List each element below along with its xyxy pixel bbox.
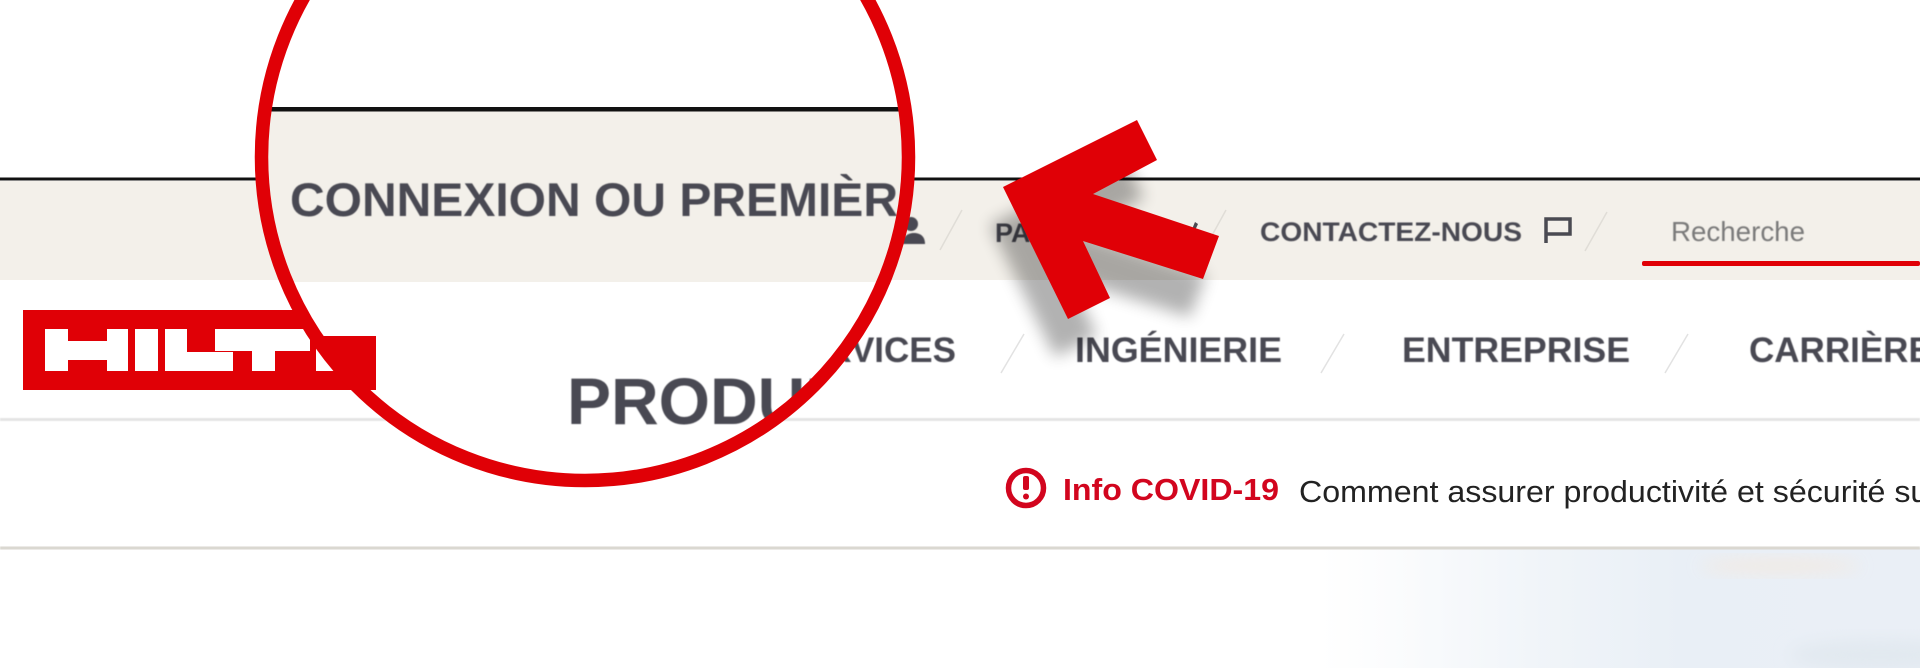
text: search placeholder: Recherche	[1671, 216, 1805, 247]
text: nav services: SERVICES	[780, 331, 956, 370]
logo: Hilti	[23, 310, 353, 390]
text: magnified login: CONNEXION OU PREMIÈRE	[290, 173, 930, 226]
icon: warning circle	[1008, 470, 1044, 506]
magnified logo fragment	[324, 336, 376, 390]
icon: person	[903, 217, 925, 244]
text: nav company: ENTREPRISE	[1402, 331, 1630, 370]
magnifier: circle with enlarged login text	[254, 0, 916, 488]
panel: utility bar	[0, 178, 1920, 280]
arrow: red pointer with shadow	[990, 120, 1219, 357]
text: nav engineering: INGÉNIERIE	[1075, 330, 1282, 370]
text: contact link: CONTACTEZ-NOUS	[1260, 217, 1522, 247]
text: partial link: PANIER	[995, 218, 1095, 248]
panel: main navigation	[0, 330, 1920, 421]
text: COVID message: Comment assurer productivité et sécurité sur	[1299, 475, 1920, 509]
text: COVID heading: Info COVID-19	[1063, 472, 1279, 507]
search underline	[1642, 261, 1920, 266]
icon: flag	[1546, 219, 1570, 243]
magnified utility bar	[268, 112, 902, 282]
panel: blurred hero photo	[1320, 548, 1920, 668]
panel: COVID info banner	[0, 470, 1920, 550]
magnifier ring	[262, 0, 908, 480]
text: magnified products: PRODUITS	[567, 364, 908, 438]
